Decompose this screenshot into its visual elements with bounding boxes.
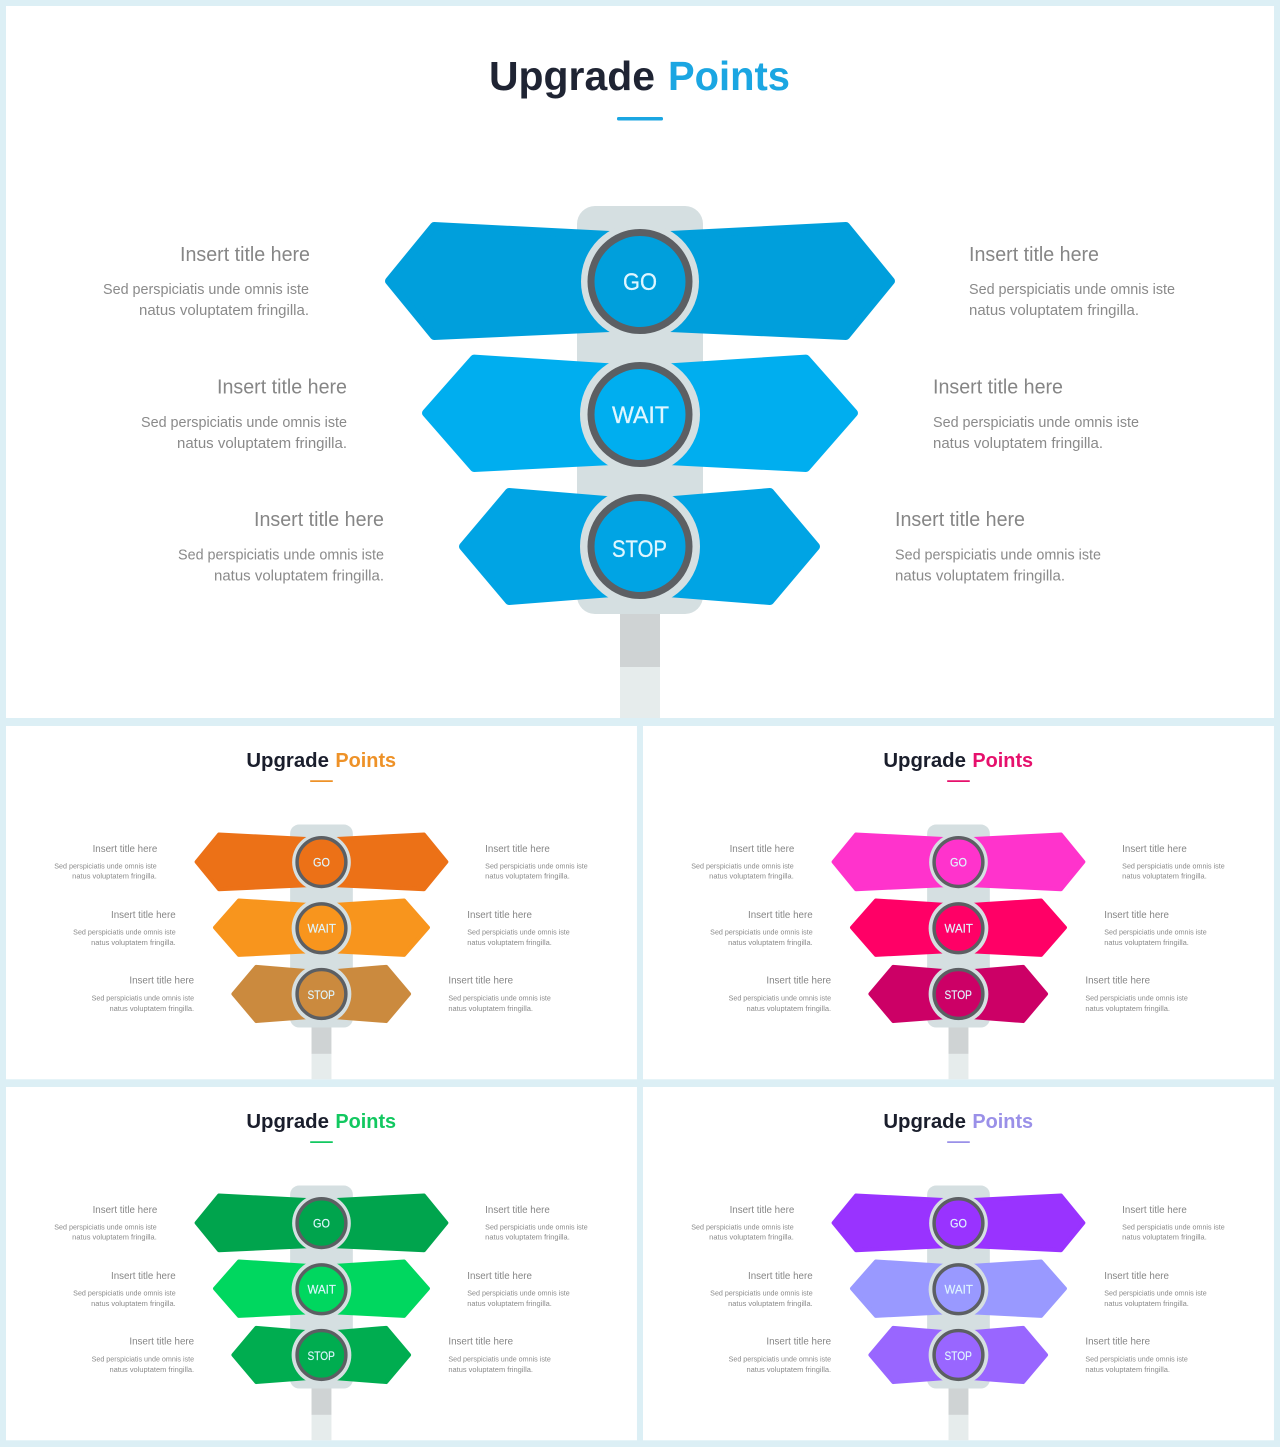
title [883,1111,1033,1133]
signpost board [927,1186,990,1389]
text block: right bottom: Insert title here [1085,976,1151,987]
sign: STOP [233,964,409,1024]
text block: right bottom: Sed perspiciatis unde omnis iste [448,993,551,1002]
text block: left middle: Insert title here [217,376,347,398]
text block: left top [691,1205,795,1242]
text block: right top [1122,844,1225,881]
text block: right bottom: Sed perspiciatis unde omnis iste [1085,993,1188,1002]
title: Upgrade [883,1111,966,1133]
text block: left bottom: Insert title here [766,976,832,987]
panel: purple slide [643,1087,1274,1440]
text block: right bottom: Insert title here [1085,1337,1151,1348]
sign: STOP [870,1325,1046,1385]
text block: left top [103,244,310,319]
text block: left middle: Insert title here [748,1271,813,1282]
text block: right top: natus voluptatem fringilla. [485,1233,570,1242]
text block: right bottom: Sed perspiciatis unde omnis iste [1085,1354,1188,1363]
title [246,1111,396,1133]
text block: right bottom [1085,976,1188,1013]
text block: right top: Sed perspiciatis unde omnis iste [1122,1222,1225,1231]
text block: right middle [933,376,1139,452]
text block: right middle: Sed perspiciatis unde omnis iste [467,1288,570,1297]
sign: WAIT: WAIT [612,402,669,429]
text block: left bottom [729,1337,832,1374]
text block: left middle: natus voluptatem fringilla. [91,938,176,947]
title: Points [668,53,790,99]
signpost pole [949,1027,968,1079]
text block: left middle: Sed perspiciatis unde omnis iste [141,414,347,431]
title [883,750,1033,772]
text block: right middle [467,1271,570,1308]
sign: GO [389,222,891,340]
text block: right middle: natus voluptatem fringilla. [1104,938,1189,947]
title [246,750,396,772]
text block: right bottom [1085,1337,1188,1374]
sign: WAIT [426,354,854,474]
text block: right top: natus voluptatem fringilla. [1122,872,1207,881]
text block: right middle [467,910,570,947]
text block: right middle: natus voluptatem fringilla. [933,435,1103,452]
text block: right top: Sed perspiciatis unde omnis iste [485,1222,588,1231]
text block: right bottom: Insert title here [895,509,1025,531]
text block: left middle [73,1271,176,1308]
text block: right middle [1104,1271,1207,1308]
text block: left top: natus voluptatem fringilla. [139,302,309,319]
sign: STOP [870,964,1046,1024]
title: Upgrade [246,1111,329,1133]
text block: right bottom: natus voluptatem fringilla. [895,568,1065,584]
text block: right middle: natus voluptatem fringilla. [1104,1299,1189,1308]
text block: right middle: Sed perspiciatis unde omnis iste [1104,1288,1207,1297]
sign: WAIT: WAIT [945,1282,974,1296]
sign: WAIT [215,1259,428,1319]
signpost board [927,825,990,1028]
panel: green slide [6,1087,637,1440]
sign: WAIT: WAIT [308,1282,337,1296]
title underline [310,780,333,782]
text block: left middle: natus voluptatem fringilla. [177,435,347,452]
text block: right middle: Sed perspiciatis unde omnis iste [467,927,570,936]
panel: orange slide [6,726,637,1079]
text block: left bottom [729,976,832,1013]
text block: right top [485,1205,588,1242]
text block: right bottom [895,509,1101,584]
text block: left top: Insert title here [730,844,795,855]
title underline [617,117,663,120]
text block: left middle: Sed perspiciatis unde omnis iste [710,1288,813,1297]
sign: STOP [463,486,816,606]
text block: left top: Insert title here [730,1205,795,1216]
signpost pole [312,1027,331,1079]
sign: GO: GO [950,1216,967,1230]
sign: STOP: STOP [945,988,972,1002]
title underline [310,1141,333,1143]
text block: left bottom: Sed perspiciatis unde omnis iste [729,1354,831,1363]
sign: STOP: STOP [612,536,667,563]
sign: GO [197,1194,446,1252]
sign: GO [834,833,1083,891]
text block: right top: natus voluptatem fringilla. [485,872,570,881]
text block: left bottom: Sed perspiciatis unde omnis iste [92,993,194,1002]
text block: right top: Sed perspiciatis unde omnis iste [485,861,588,870]
text block: left bottom: natus voluptatem fringilla. [110,1004,194,1013]
text block: right top: Insert title here [485,844,550,855]
text block: right bottom: natus voluptatem fringilla. [448,1365,533,1374]
text block: left middle: natus voluptatem fringilla. [728,1299,813,1308]
title: Points [335,1111,396,1133]
text block: left top: Sed perspiciatis unde omnis iste [54,1222,157,1231]
text block: left top: natus voluptatem fringilla. [72,872,157,881]
text block: left bottom: Insert title here [254,509,384,531]
text block: right top: Sed perspiciatis unde omnis iste [969,281,1175,298]
text block: right middle: Sed perspiciatis unde omnis iste [1104,927,1207,936]
text block: left bottom: Insert title here [766,1337,832,1348]
sign: STOP: STOP [945,1349,972,1363]
text block: left top [691,844,795,881]
text block: left top: Sed perspiciatis unde omnis iste [54,861,157,870]
title underline [947,780,970,782]
text block: left bottom: Sed perspiciatis unde omnis iste [92,1354,194,1363]
title: Upgrade [883,750,966,772]
signpost pole [949,1388,968,1440]
text block: left top: Sed perspiciatis unde omnis iste [691,861,794,870]
text block: right top [485,844,588,881]
title: Points [972,750,1033,772]
text block: left bottom: Sed perspiciatis unde omnis iste [178,546,384,564]
text block: left middle: natus voluptatem fringilla. [728,938,813,947]
sign: WAIT: WAIT [308,921,337,935]
text block: right bottom [448,976,551,1013]
title underline [947,1141,970,1143]
text block: left top: Insert title here [180,244,310,266]
sign: GO [197,833,446,891]
text block: right middle: natus voluptatem fringilla. [467,938,552,947]
text block: right bottom: natus voluptatem fringilla. [1085,1004,1170,1013]
sign: GO: GO [313,1216,330,1230]
text block: left bottom [92,1337,195,1374]
signpost pole [312,1388,331,1440]
text block: left bottom: Sed perspiciatis unde omnis iste [729,993,831,1002]
text block: right top: natus voluptatem fringilla. [1122,1233,1207,1242]
text block: left middle [710,910,813,947]
text block: left middle: Sed perspiciatis unde omnis iste [73,927,176,936]
signpost board [290,1186,353,1389]
text block: left middle: natus voluptatem fringilla. [91,1299,176,1308]
sign: WAIT [852,898,1065,958]
text block: right top: Sed perspiciatis unde omnis iste [1122,861,1225,870]
title [489,53,790,99]
text block: right bottom [448,1337,551,1374]
text block: left bottom: natus voluptatem fringilla. [747,1004,831,1013]
text block: left middle: Insert title here [111,910,176,921]
text block: left middle [73,910,176,947]
text block: right top: natus voluptatem fringilla. [969,302,1139,319]
sign: WAIT [215,898,428,958]
sign: GO: GO [623,269,657,296]
title: Upgrade [489,53,655,99]
text block: left top: natus voluptatem fringilla. [709,1233,794,1242]
text block: left middle [141,376,347,452]
signpost board [577,206,703,614]
text block: right bottom: Insert title here [448,1337,514,1348]
signpost pole [620,613,660,718]
sign: STOP: STOP [308,988,335,1002]
text block: left bottom: natus voluptatem fringilla. [747,1365,831,1374]
text block: right top [1122,1205,1225,1242]
text block: right middle [1104,910,1207,947]
text block: right middle: Insert title here [933,376,1063,398]
text block: right bottom: Sed perspiciatis unde omnis iste [448,1354,551,1363]
text block: left bottom: Insert title here [129,976,195,987]
sign: WAIT: WAIT [945,921,974,935]
text block: right middle: Insert title here [1104,910,1169,921]
sign: GO: GO [950,855,967,869]
text block: left top: Sed perspiciatis unde omnis iste [691,1222,794,1231]
text block: left middle: Insert title here [111,1271,176,1282]
title: Points [972,1111,1033,1133]
sign: GO: GO [313,855,330,869]
text block: left top: Sed perspiciatis unde omnis iste [103,281,309,298]
sign: WAIT [852,1259,1065,1319]
text block: right middle: Insert title here [467,910,532,921]
sign: STOP: STOP [308,1349,335,1363]
text block: left top [54,1205,158,1242]
sign: STOP [233,1325,409,1385]
text block: left middle [710,1271,813,1308]
text block: left middle: Sed perspiciatis unde omnis iste [73,1288,176,1297]
text block: left middle: Insert title here [748,910,813,921]
text block: left bottom [178,509,384,584]
text block: right bottom: Sed perspiciatis unde omnis iste [895,546,1101,564]
panel: blue main slide [6,6,1274,718]
title: Upgrade [246,750,329,772]
text block: right middle: Insert title here [1104,1271,1169,1282]
text block: right middle: natus voluptatem fringilla. [467,1299,552,1308]
text block: left bottom: natus voluptatem fringilla. [110,1365,194,1374]
sign: GO [834,1194,1083,1252]
text block: right top: Insert title here [969,244,1099,266]
signpost board [290,825,353,1028]
text block: right bottom: natus voluptatem fringilla. [448,1004,533,1013]
text block: left top [54,844,158,881]
text block: right bottom: Insert title here [448,976,514,987]
text block: right top: Insert title here [1122,1205,1187,1216]
text block: left top: natus voluptatem fringilla. [72,1233,157,1242]
text block: left bottom [92,976,195,1013]
panel: pink slide [643,726,1274,1079]
text block: right top: Insert title here [485,1205,550,1216]
text block: left bottom: Insert title here [129,1337,195,1348]
text block: right middle: Insert title here [467,1271,532,1282]
text block: right top [969,244,1175,319]
text block: left middle: Sed perspiciatis unde omnis iste [710,927,813,936]
text block: right middle: Sed perspiciatis unde omnis iste [933,414,1139,431]
title: Points [335,750,396,772]
text block: left top: Insert title here [93,844,158,855]
text block: left top: Insert title here [93,1205,158,1216]
text block: right bottom: natus voluptatem fringilla. [1085,1365,1170,1374]
text block: left bottom: natus voluptatem fringilla. [214,568,384,584]
text block: left top: natus voluptatem fringilla. [709,872,794,881]
text block: right top: Insert title here [1122,844,1187,855]
